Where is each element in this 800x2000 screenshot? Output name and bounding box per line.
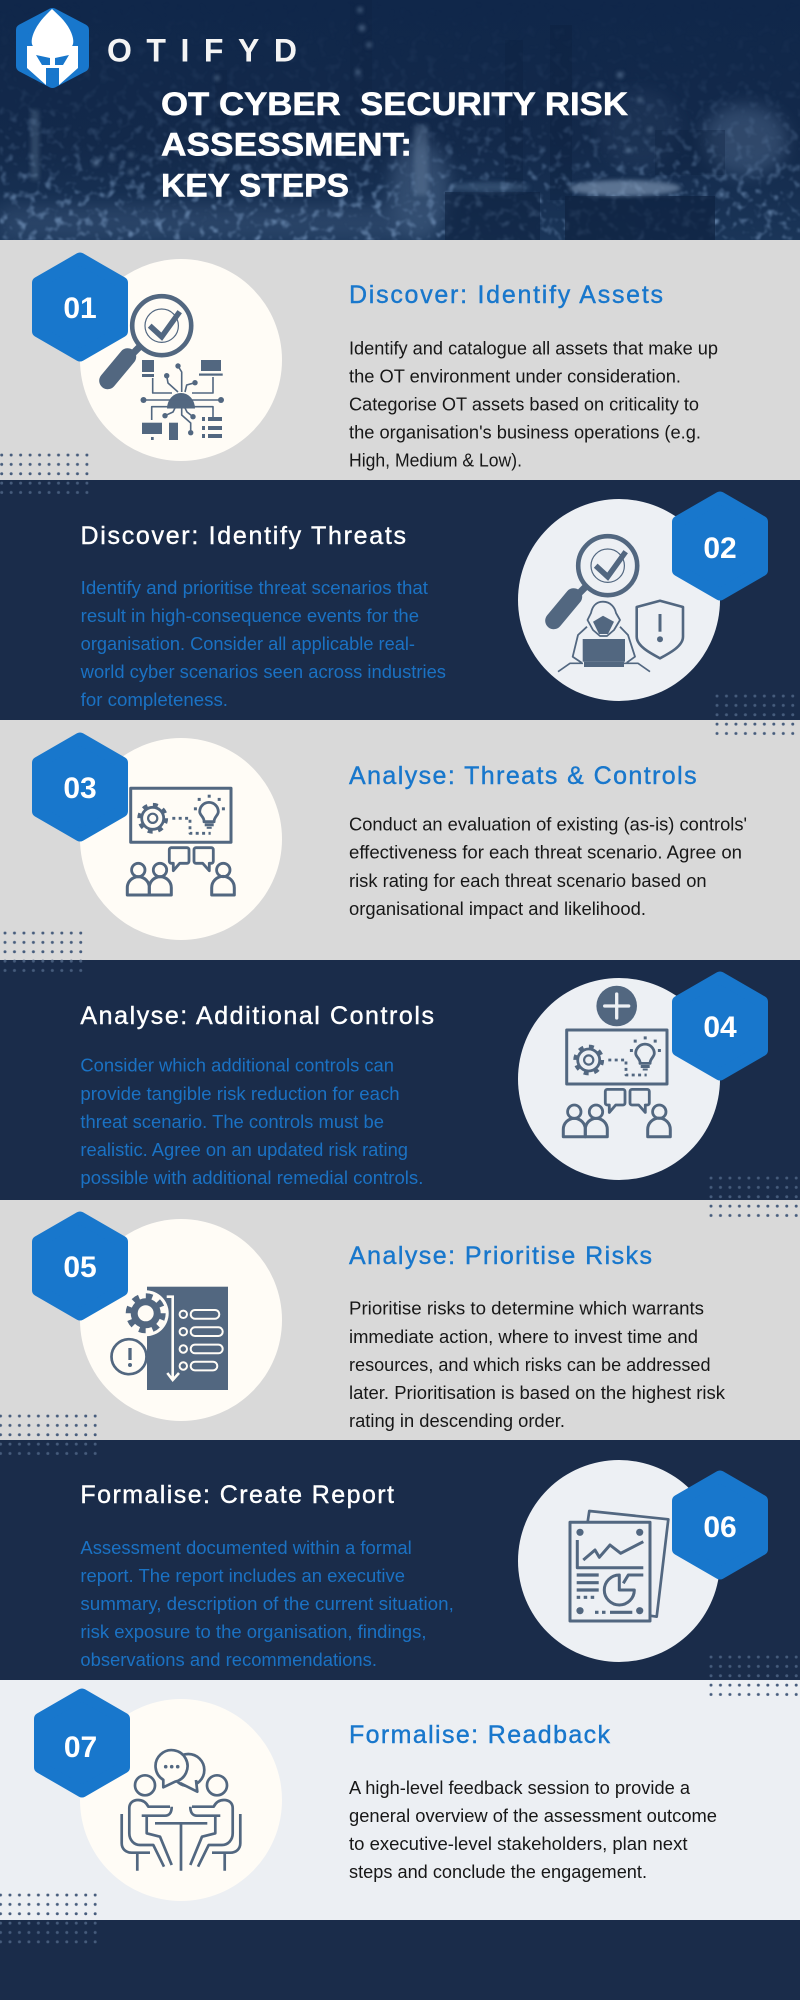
body text: realistic. Agree on an updated risk rating — [80, 1140, 408, 1160]
body text: organisation. Consider all applicable real- — [81, 634, 415, 654]
heading: Analyse: Additional Controls — [80, 1002, 434, 1030]
panel: step 03 Analyse Threats and Controls — [0, 720, 800, 960]
body text: world cyber scenarios seen across industries — [80, 662, 446, 682]
body text: risk exposure to the organisation, findings, — [80, 1622, 427, 1642]
hexagon number 01 — [38, 258, 122, 356]
body text — [349, 814, 747, 919]
heading: Analyse: Threats & Controls — [349, 762, 697, 790]
body text: Identify and prioritise threat scenarios that — [81, 578, 428, 598]
body text: provide tangible risk reduction for each — [80, 1084, 400, 1104]
title: ASSESSMENT: — [161, 127, 412, 163]
hexagon number 07: 07 — [64, 1731, 97, 1764]
hexagon number 06 — [678, 1476, 762, 1574]
panel: step 07 Formalise Readback — [0, 1680, 800, 1920]
body text — [80, 1538, 454, 1670]
hexagon number 04 — [678, 978, 762, 1074]
panel: step 05 Analyse Prioritise Risks — [0, 1200, 800, 1440]
hexagon number 02 — [678, 498, 762, 594]
hexagon number 01: 01 — [63, 292, 97, 325]
icon: report pages in circle — [518, 1460, 720, 1662]
left seated person — [122, 1775, 172, 1871]
body text: later. Prioritisation is based on the highest risk — [349, 1383, 726, 1403]
body text: summary, description of the current situation, — [80, 1594, 454, 1614]
body text: observations and recommendations. — [80, 1650, 377, 1670]
heading: Discover: Identify Assets — [349, 281, 663, 309]
body text: the organisation's business operations (e.g. — [349, 422, 701, 442]
body text: general overview of the assessment outcome — [349, 1806, 717, 1826]
panel: step 04 Analyse Additional Controls — [0, 960, 800, 1200]
panel: header banner — [0, 0, 800, 240]
body text: A high-level feedback session to provide a — [349, 1778, 691, 1798]
hexagon number 02: 02 — [703, 532, 737, 565]
hexagon number 03: 03 — [63, 772, 97, 805]
hexagon number 04: 04 — [703, 1011, 737, 1044]
body text: resources, and which risks can be addressed — [349, 1355, 710, 1375]
hexagon number 07 — [40, 1694, 124, 1792]
logo wordmark: OTIFYD — [107, 33, 297, 69]
body text: immediate action, where to invest time and — [349, 1327, 698, 1347]
icon: controls board in circle — [80, 738, 282, 940]
body text: report. The report includes an executive — [80, 1566, 405, 1586]
panel: step 01 Discover Identify Assets — [0, 240, 800, 480]
body text: Identify and catalogue all assets that make up — [349, 338, 718, 358]
body text: result in high-consequence events for the — [81, 606, 419, 626]
body text — [80, 1056, 423, 1188]
hexagon number 03 — [38, 738, 122, 836]
icon: additional controls in circle — [518, 978, 720, 1180]
body text — [349, 1299, 726, 1431]
body text — [80, 578, 446, 710]
body text: for completeness. — [81, 690, 228, 710]
heading: Analyse: Prioritise Risks — [349, 1242, 652, 1270]
header refinery backdrop — [0, 0, 800, 240]
body text: possible with additional remedial controls. — [80, 1168, 423, 1188]
right seated person — [190, 1775, 240, 1871]
icon: threat actor in circle — [518, 499, 720, 701]
heading: Discover: Identify Threats — [80, 522, 406, 550]
heading: Formalise: Readback — [349, 1721, 610, 1749]
body text — [349, 338, 718, 470]
icon: meeting in circle — [80, 1699, 282, 1901]
body text: Prioritise risks to determine which warrants — [349, 1299, 704, 1319]
body text: High, Medium & Low). — [349, 450, 522, 470]
icon: asset discovery in circle — [80, 259, 282, 461]
body text: effectiveness for each threat scenario. Agree on — [349, 843, 742, 863]
hexagon number 05 — [38, 1218, 122, 1314]
icon: prioritised list in circle — [80, 1219, 282, 1421]
panel: step 06 Formalise Create Report — [0, 1440, 800, 1680]
body text: Conduct an evaluation of existing (as-is) controls' — [349, 814, 747, 834]
body text: to executive-level stakeholders, plan next — [349, 1834, 688, 1854]
body text: risk rating for each threat scenario based on — [349, 871, 707, 891]
body text: threat scenario. The controls must be — [80, 1112, 384, 1132]
title: OT CYBER SECURITY RISK — [161, 86, 628, 122]
logo badge — [22, 9, 83, 85]
body text — [349, 1778, 717, 1882]
hexagon number 06: 06 — [703, 1511, 737, 1544]
footer band — [0, 1920, 800, 2000]
body text: steps and conclude the engagement. — [349, 1862, 647, 1882]
heading: Formalise: Create Report — [80, 1481, 394, 1509]
title — [161, 86, 628, 204]
body text: Consider which additional controls can — [80, 1056, 394, 1076]
body text: Assessment documented within a formal — [80, 1538, 412, 1558]
body text: rating in descending order. — [349, 1411, 565, 1431]
body text: Categorise OT assets based on criticality to — [349, 394, 699, 414]
body text: organisational impact and likelihood. — [349, 899, 646, 919]
panel: step 02 Discover Identify Threats — [0, 480, 800, 720]
body text: the OT environment under consideration. — [349, 366, 681, 386]
hexagon number 05: 05 — [63, 1251, 97, 1284]
title: KEY STEPS — [161, 168, 349, 204]
